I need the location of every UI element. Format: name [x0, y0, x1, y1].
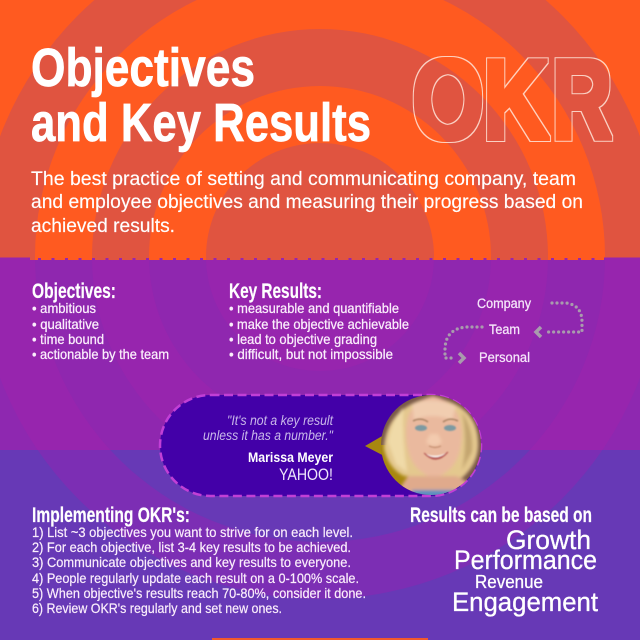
panel: objectives list: Objectives: — [32, 280, 116, 303]
panel: results can be based on: Growth — [506, 525, 591, 555]
quote text: "It's not a key result — [227, 413, 334, 428]
panel: implementing OKRs steps: Implementing OKR's: — [32, 504, 190, 527]
subtitle text block: The best practice of setting and communicating company, team — [31, 168, 576, 190]
logo: Yahoo wordmark: YAHOO! — [279, 465, 333, 484]
panel: key results list: • difficult, but not impossible — [229, 346, 393, 362]
panel: key results list — [229, 280, 409, 362]
quote author: Marissa Meyer — [248, 450, 334, 465]
quote text — [203, 413, 334, 443]
scalloped edge between header and purple section — [30, 258, 604, 260]
panel: objectives list: • qualitative — [32, 316, 99, 332]
portrait photo illustration — [381, 395, 481, 500]
panel: objectives list — [32, 280, 169, 362]
outlined OKR wordmark — [412, 37, 612, 164]
panel: implementing OKRs steps — [32, 504, 366, 616]
outlined OKR wordmark: R — [552, 37, 612, 164]
panel: cascade of company, team, personal — [445, 296, 582, 365]
panel: key results list: • make the objective achievable — [229, 316, 409, 332]
title — [31, 38, 371, 153]
panel: results can be based on: Performance — [454, 545, 597, 575]
panel: objectives list: • ambitious — [32, 300, 96, 316]
panel: purple middle background with rings — [0, 258, 640, 450]
panel: implementing OKRs steps: 1) List ~3 objectives you want to strive for on each level. — [32, 524, 353, 540]
panel: results can be based on: Revenue — [475, 572, 543, 592]
title: and Key Results — [31, 93, 371, 153]
panel: cascade of company, team, personal: Personal — [479, 350, 530, 365]
panel: implementing OKRs steps: 2) For each objective, list 3-4 key results to be achieved. — [32, 539, 351, 555]
panel: orange header background with concentric rings — [0, 0, 640, 260]
panel: key results list: • measurable and quantifiable — [229, 300, 399, 316]
orange bar at bottom edge — [212, 638, 428, 640]
panel: objectives list: • time bound — [32, 331, 104, 347]
panel: cascade of company, team, personal: Company — [477, 296, 531, 311]
panel: implementing OKRs steps: 5) When objective's results reach 70-80%, consider it done. — [32, 585, 366, 601]
outlined OKR wordmark: K — [483, 37, 549, 164]
quote text: unless it has a number." — [203, 428, 334, 443]
panel: implementing OKRs steps: 4) People regularly update each result on a 0-100% scale. — [32, 570, 359, 586]
panel: implementing OKRs steps: 6) Review OKR's regularly and set new ones. — [32, 600, 282, 616]
subtitle text block — [31, 168, 583, 237]
panel: quote bubble — [160, 395, 481, 500]
panel: blue-violet bottom background with ring — [38, 450, 602, 599]
panel: results can be based on: Engagement — [452, 587, 598, 617]
panel: results can be based on — [410, 504, 598, 617]
icon: speech tail — [365, 435, 386, 457]
arrow: company to team — [536, 303, 582, 337]
subtitle text block: achieved results. — [31, 215, 175, 237]
panel: implementing OKRs steps: 3) Communicate objectives and key results to everyone. — [32, 554, 351, 570]
outlined OKR wordmark: O — [412, 37, 484, 164]
panel: key results list: • lead to objective grading — [229, 331, 377, 347]
title: Objectives — [31, 38, 255, 98]
panel: objectives list: • actionable by the team — [32, 346, 169, 362]
subtitle text block: and employee objectives and measuring their progress based on — [31, 191, 583, 213]
panel: key results list: Key Results: — [229, 280, 322, 303]
arrow: team to personal — [445, 327, 482, 363]
panel: cascade of company, team, personal: Team — [489, 322, 520, 337]
